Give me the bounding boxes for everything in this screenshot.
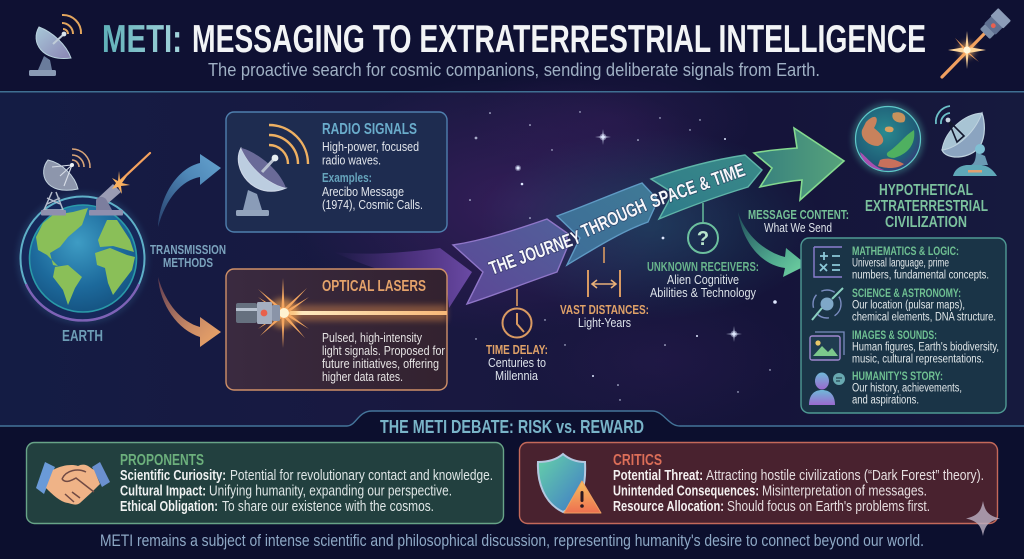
subtitle: The proactive search for cosmic companions, sending deliberate signals from Earth. [208,59,820,80]
text: critics: Unintended Consequences: [613,484,759,500]
callout: time delay: TIME DELAY: [486,342,548,357]
text: radio signals [322,121,423,212]
label: transmission methods: TRANSMISSION [150,242,226,257]
text: critics: Misinterpretation of messages. [762,484,927,500]
item: mathematics and logic [814,246,989,282]
text: proponents [120,452,493,515]
label: hypothetical civilization [865,182,988,231]
icon: laser emitter [236,278,309,348]
callout: time delay [486,289,548,383]
item: mathematics and logic: MATHEMATICS & LOGIC: [852,246,959,258]
item: mathematics and logic: numbers, fundamental concepts. [852,270,989,282]
callout: vast distances: Light-Years [578,315,631,330]
item: science and astronomy: Our location (pulsar maps), [852,300,965,312]
dish transmitter [41,149,90,216]
ribbon: segment 4 [651,155,762,219]
panel: radio signals [226,112,447,232]
icon: handshake [36,462,110,505]
text: optical lasers: future initiatives, offering [322,356,439,371]
text: optical lasers [322,278,446,384]
text: critics [613,452,984,515]
sparkle star [595,129,611,145]
text: radio signals: High-power, focused [322,139,419,154]
laser emitter [89,153,150,216]
laser beam [282,305,447,321]
arrow: to radio signals [158,154,221,227]
heading: the METI debate: THE METI DEBATE: RISK vs. REWARD [380,417,644,437]
continents [36,208,135,305]
label: transmission methods: METHODS [163,255,213,270]
text: proponents: Unifying humanity, expanding our perspective. [209,484,452,500]
item: science and astronomy: chemical elements, DNA structure. [852,312,996,324]
callout: vast distances [560,247,649,330]
item: humanity's story: Our history, achievements, [852,382,962,394]
icon: header laser [942,8,1011,77]
ribbon label: SPACE & TIME [648,160,748,213]
ribbon: segment 3 [557,183,658,265]
label: hypothetical civilization: HYPOTHETICAL [879,182,973,199]
callout: unknown receivers: UNKNOWN RECEIVERS: [647,259,759,274]
icon: earth with transmitters [16,149,150,324]
text: proponents: Ethical Obligation: [120,499,218,515]
text: radio signals: (1974), Cosmic Calls. [322,197,423,212]
arrow: to message content [738,212,807,277]
callout: time delay: Centuries to [488,355,546,370]
label: Earth: EARTH [62,328,103,345]
watermark sparkle [966,501,1000,536]
callout: unknown receivers: Abilities & Technology [650,285,756,300]
item: science and astronomy: SCIENCE & ASTRONOMY: [852,288,961,300]
text: proponents: PROPONENTS [120,452,204,469]
item: mathematics and logic: Universal language, prime [852,258,949,270]
panel: critics [520,442,998,524]
panel: optical lasers [226,269,447,390]
label: message content: What We Send [764,220,832,235]
text: optical lasers: Pulsed, high-intensity [322,330,422,345]
item: images and sounds: music, cultural representations. [852,354,984,366]
sparkle star [515,165,521,171]
icon: radio dish [236,125,308,216]
text: proponents: Potential for revolutionary contact and knowledge. [230,468,493,484]
callout: vast distances: VAST DISTANCES: [560,302,649,317]
text: critics: Should focus on Earth's problems first. [727,499,930,515]
text: critics: Potential Threat: [613,468,703,484]
text: radio signals: Arecibo Message [322,184,404,199]
ribbon label: THE JOURNEY [487,227,584,280]
item: humanity's story: and aspirations. [852,394,919,406]
icon: alien planet [852,103,924,175]
sparkle star [726,326,742,342]
text: critics: CRITICS [613,452,662,469]
ribbon label: THROUGH [578,195,650,243]
text: proponents: To share our existence with the cosmos. [222,499,434,515]
ribbon: arrow head [754,128,844,200]
text: proponents: Scientific Curiosity: [120,468,226,484]
text: optical lasers: light signals. Proposed for [322,343,446,358]
ribbon: faded trail [333,248,472,308]
arrow: to optical lasers [158,277,221,347]
text: optical lasers: OPTICAL LASERS [322,278,426,295]
callout: unknown receivers: ? [697,228,709,250]
item: humanity's story [809,371,962,406]
label: transmission methods [150,242,226,270]
starfield [459,111,777,401]
label: message content: MESSAGE CONTENT: [748,207,849,222]
text: optical lasers: higher data rates. [322,369,403,384]
panel: proponents [26,442,504,524]
text: proponents: Cultural Impact: [120,484,206,500]
callout: unknown receivers [647,203,759,300]
text: radio signals: Examples: [322,170,372,185]
title: METI: [102,18,182,61]
item: science and astronomy [812,288,996,324]
journey ribbon [333,128,844,308]
text: critics: Resource Allocation: [613,499,724,515]
callout: time delay: Millennia [495,368,539,383]
icon: alien dish [936,106,997,176]
text: radio signals: radio waves. [322,152,381,168]
text: radio signals: RADIO SIGNALS [322,121,417,138]
label: hypothetical civilization: CIVILIZATION [885,214,967,231]
panel: message content [801,238,1006,413]
ribbon label [487,160,748,280]
icon: shield with warning [538,454,601,513]
globe [30,205,136,312]
label: message content [748,207,849,235]
ribbon: segment 2 [453,219,567,304]
item: images and sounds [810,330,999,366]
icon: header radio dish [29,15,81,76]
callout: unknown receivers: Alien Cognitive [667,272,739,287]
item: humanity's story: HUMANITY'S STORY: [852,371,943,383]
item: images and sounds: IMAGES & SOUNDS: [852,330,937,342]
